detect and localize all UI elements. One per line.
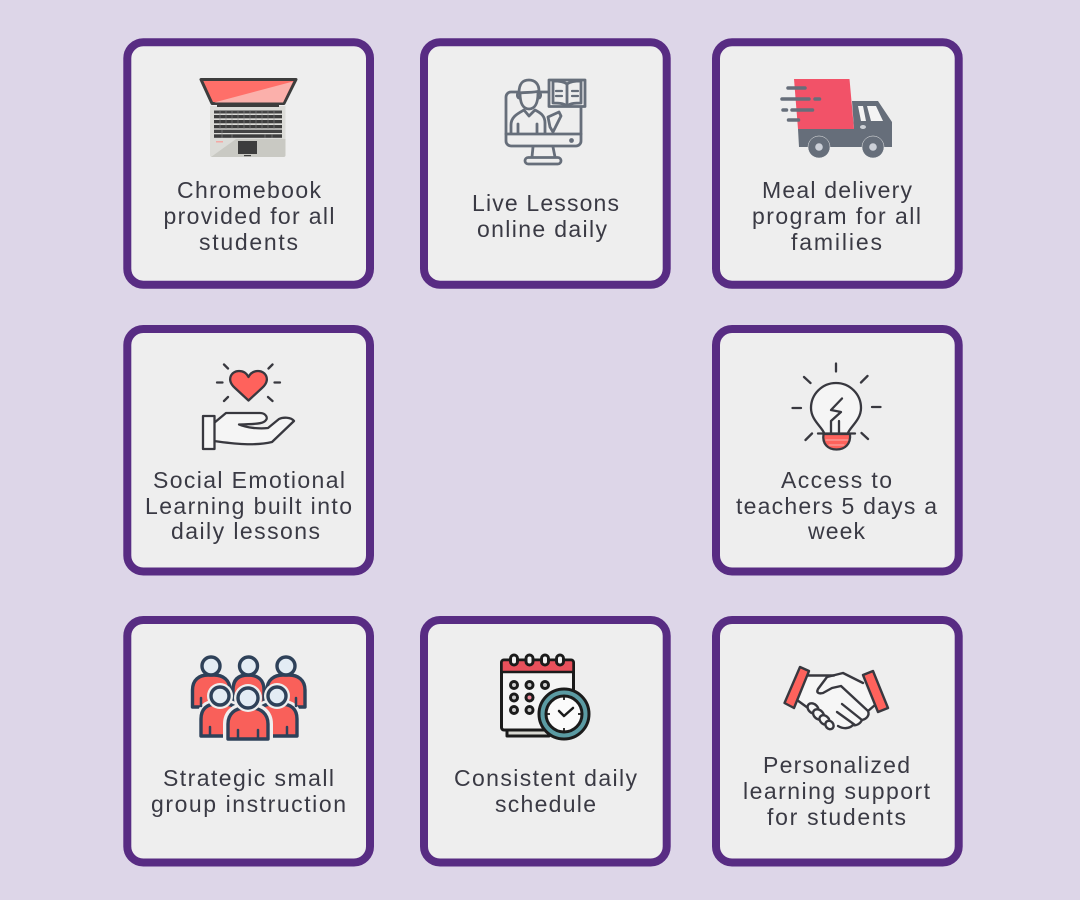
label: Access to teachers: teachers 5 days a xyxy=(736,493,937,519)
label: Access to teachers: Access to xyxy=(781,467,892,493)
panel: Strategic small group xyxy=(127,620,370,862)
label: Consistent daily schedule xyxy=(454,765,638,817)
label: Personalized learning support: for students xyxy=(767,804,906,830)
label: Access to teachers xyxy=(736,467,937,544)
label: Social Emotional Learning: Learning built into xyxy=(145,493,352,519)
icon: teacher on monitor with book xyxy=(506,80,585,164)
panel: Social Emotional Learning xyxy=(127,329,370,572)
label: Strategic small group: group instruction xyxy=(151,791,346,817)
label: Live Lessons xyxy=(472,190,619,242)
icon: light bulb xyxy=(792,364,880,450)
label: Meal delivery xyxy=(752,177,921,255)
panel: Meal delivery xyxy=(716,42,959,285)
label: Live Lessons: online daily xyxy=(477,216,608,242)
label: Personalized learning support xyxy=(743,752,931,830)
label: Chromebook xyxy=(164,177,334,255)
panel: Personalized learning support xyxy=(716,620,959,862)
label: Chromebook: provided for all xyxy=(164,203,334,229)
panel: Chromebook xyxy=(127,42,370,285)
label: Meal delivery: program for all xyxy=(752,203,921,229)
label: Meal delivery: Meal delivery xyxy=(762,177,912,203)
label: Chromebook: students xyxy=(199,229,298,255)
icon: laptop xyxy=(201,80,296,157)
icon: hand holding heart xyxy=(203,364,294,449)
label: Access to teachers: week xyxy=(807,518,866,544)
label: Chromebook: Chromebook xyxy=(177,177,322,203)
label: Social Emotional Learning: daily lessons xyxy=(171,518,320,544)
label: Live Lessons: Live Lessons xyxy=(472,190,619,216)
label: Consistent daily schedule: schedule xyxy=(495,791,596,817)
panel: Consistent daily schedule xyxy=(424,620,667,862)
icon: calendar and clock xyxy=(502,655,589,739)
icon: group of people xyxy=(192,657,305,739)
label: Consistent daily schedule: Consistent daily xyxy=(454,765,638,791)
icon: delivery truck xyxy=(782,79,892,158)
label: Personalized learning support: Personalized xyxy=(763,752,910,778)
panel: Access to teachers xyxy=(716,329,959,572)
label: Social Emotional Learning xyxy=(145,467,352,544)
label: Personalized learning support: learning support xyxy=(743,778,931,804)
panel: Live Lessons xyxy=(424,42,667,285)
label: Meal delivery: families xyxy=(791,229,882,255)
icon: handshake xyxy=(784,667,888,731)
label: Strategic small group xyxy=(151,765,346,817)
label: Social Emotional Learning: Social Emotional xyxy=(153,467,345,493)
label: Strategic small group: Strategic small xyxy=(163,765,334,791)
